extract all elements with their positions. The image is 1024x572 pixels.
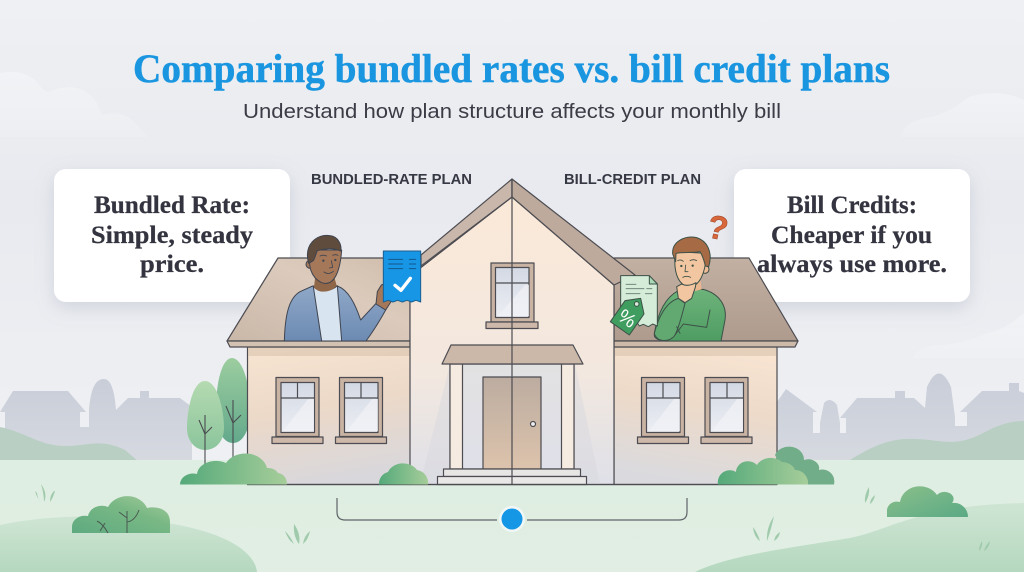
sweater xyxy=(654,289,725,341)
foreground mounds xyxy=(0,503,1024,572)
side window 1 xyxy=(272,378,323,444)
t-shirt xyxy=(313,286,342,341)
eave shadows xyxy=(248,347,776,356)
percent tag: % xyxy=(614,306,640,333)
ear xyxy=(306,260,314,268)
bill document xyxy=(621,276,657,327)
callout text: bill credits: Cheaper if you xyxy=(771,222,932,249)
neck xyxy=(314,276,337,292)
grass tufts xyxy=(35,484,990,551)
hair xyxy=(307,235,341,263)
bushes xyxy=(72,447,968,533)
right wing wall xyxy=(614,347,777,484)
central gable wall xyxy=(410,197,614,484)
left wing roof xyxy=(227,258,410,341)
facial features xyxy=(320,255,338,274)
receipt icon xyxy=(383,251,421,302)
callout text: bundled rate xyxy=(91,192,254,278)
person: bundled-rate customer with receipt xyxy=(284,235,421,341)
callout text: bill credits xyxy=(757,192,947,278)
raised arm xyxy=(654,298,685,341)
ground line and centre divider xyxy=(247,179,777,484)
callout text: bundled rate: Bundled Rate: xyxy=(94,192,250,219)
eyes xyxy=(323,256,335,264)
hair xyxy=(673,237,710,267)
gable roof band left xyxy=(421,179,512,266)
callout text: bundled rate: price. xyxy=(140,251,204,278)
face xyxy=(309,250,342,283)
neck xyxy=(686,277,702,293)
house xyxy=(227,179,798,484)
right eave band xyxy=(614,341,798,347)
distant hills xyxy=(0,421,1024,461)
side window 3 xyxy=(638,378,688,444)
callout text: bundled rate: Simple, steady xyxy=(91,222,254,249)
title: Comparing bundled rates vs. bill credit plans xyxy=(133,46,890,91)
forearm xyxy=(675,310,710,335)
callout card: bill credits xyxy=(734,169,970,302)
side window 4 xyxy=(701,378,752,444)
upper window xyxy=(486,263,538,328)
facial features xyxy=(678,260,697,277)
clouds xyxy=(0,72,1024,358)
trees left of house xyxy=(187,358,250,469)
porch xyxy=(438,345,586,484)
label: bill-credit plan: BILL-CREDIT PLAN xyxy=(564,172,701,188)
eyes xyxy=(681,262,693,269)
callout text: bill credits: Bill Credits: xyxy=(787,192,917,219)
icon: question mark: ? xyxy=(704,207,732,248)
gable roof band right xyxy=(512,179,635,285)
slider control xyxy=(337,498,687,532)
face xyxy=(675,252,707,287)
callout text: bill credits: always use more. xyxy=(757,251,947,278)
person: bill-credit customer thinking xyxy=(610,237,725,341)
side window 2 xyxy=(336,378,386,444)
lawn xyxy=(0,460,1024,572)
jacket xyxy=(284,286,386,341)
distant neighbourhood skyline xyxy=(0,374,1024,460)
left eave band xyxy=(227,341,410,347)
ear xyxy=(701,265,709,273)
right wing roof xyxy=(614,258,798,341)
hand xyxy=(376,284,392,310)
hand under chin xyxy=(677,283,696,303)
subtitle: Understand how plan structure affects your monthly bill xyxy=(243,100,781,123)
wall shading xyxy=(420,364,600,484)
left wing wall xyxy=(248,347,410,484)
label: bundled-rate plan: BUNDLED-RATE PLAN xyxy=(311,172,472,188)
callout card: bundled rate xyxy=(54,169,290,302)
